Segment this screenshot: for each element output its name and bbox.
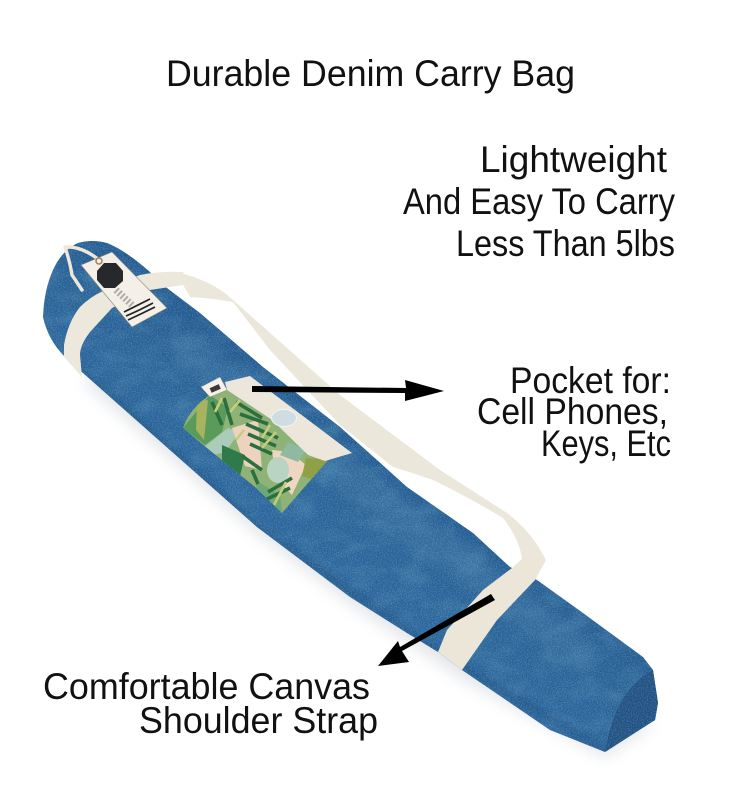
bottom canvas band (438, 558, 546, 670)
text block: pocket: Cell Phones, (477, 391, 668, 432)
pocket flap (225, 376, 352, 461)
drawstring cord (65, 247, 99, 290)
top canvas band (64, 272, 193, 377)
arrow: to shoulder strap (378, 594, 495, 666)
text block: shoulder strap: Shoulder Strap (139, 700, 378, 741)
text block: lightweight (403, 139, 675, 264)
text block: shoulder strap: Comfortable Canvas (43, 666, 370, 707)
text block: pocket: Keys, Etc (541, 423, 671, 464)
shoulder strap (176, 272, 546, 580)
text block: lightweight: Less Than 5lbs (456, 223, 675, 264)
infographic canvas (43, 59, 675, 758)
title: Durable Denim Carry Bag (166, 53, 575, 94)
text block: pocket (477, 360, 671, 464)
product: denim carry bag (30, 230, 670, 770)
arrow: to pocket (252, 380, 444, 401)
pocket label (201, 377, 227, 397)
bag shadow (85, 360, 655, 758)
text block: pocket: Pocket for: (510, 360, 671, 401)
pocket fabric (180, 390, 330, 515)
denim body (30, 230, 670, 770)
text block: shoulder strap (43, 666, 378, 741)
text block: lightweight: Lightweight (480, 139, 668, 180)
pocket button (272, 410, 296, 426)
hang tag (81, 252, 167, 327)
text block: lightweight: And Easy To Carry (403, 181, 675, 222)
